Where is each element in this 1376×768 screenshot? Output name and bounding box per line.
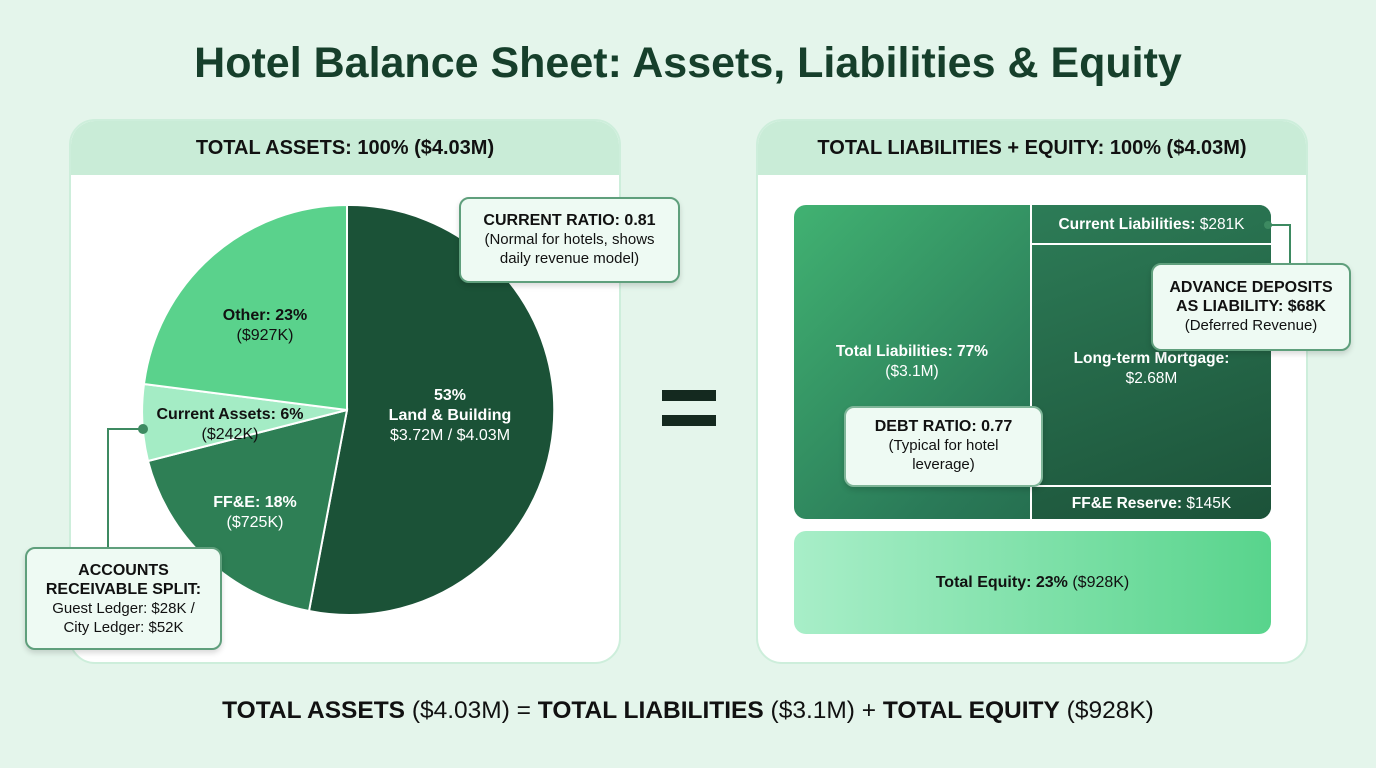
panel: assets	[69, 119, 621, 664]
callout: accounts receivable	[25, 547, 222, 650]
block: right column	[1032, 205, 1271, 519]
current liabilities: Current Liabilities: $281K	[1058, 216, 1245, 233]
slice: other	[144, 205, 347, 410]
callout: debt ratio	[844, 406, 1043, 487]
callout: debt ratio: leverage)	[912, 456, 975, 473]
label: land & building: $3.72M / $4.03M	[390, 427, 510, 444]
callout: debt ratio: (Typical for hotel	[888, 437, 999, 454]
long-term mortgage: Long-term Mortgage:	[1074, 350, 1229, 367]
slice: current assets	[142, 384, 347, 461]
callout: advance deposits: ADVANCE DEPOSITS	[1169, 279, 1333, 296]
label: FF&E	[213, 494, 297, 531]
block: total equity	[794, 531, 1271, 634]
callout: current ratio: (Normal for hotels, shows	[484, 231, 655, 248]
connector: AR	[108, 429, 143, 548]
label: current assets	[156, 406, 304, 443]
assets header	[71, 121, 619, 175]
FF&E reserve: FF&E Reserve: $145K	[1072, 495, 1231, 512]
label: land & building	[389, 387, 511, 444]
callout: accounts receivable: Guest Ledger: $28K /	[52, 600, 195, 617]
liabilities header	[758, 121, 1306, 175]
callout: current ratio: CURRENT RATIO: 0.81	[483, 212, 656, 229]
callout: current ratio	[459, 197, 680, 283]
callout: accounts receivable: ACCOUNTS	[78, 562, 169, 579]
label: other: ($927K)	[237, 327, 293, 344]
block: total liabilities	[836, 343, 988, 380]
block: total liabilities: Total Liabilities: 77%	[836, 343, 988, 360]
label: land & building: Land & Building	[389, 407, 511, 424]
panel: liabilities + equity	[756, 119, 1308, 664]
label: current assets: Current Assets: 6%	[156, 406, 304, 423]
block: total liabilities: ($3.1M)	[885, 363, 939, 380]
slice: FF&E	[148, 410, 347, 611]
label: current assets: ($242K)	[202, 426, 258, 443]
liabilities header: TOTAL LIABILITIES + EQUITY: 100% ($4.03M)	[817, 137, 1247, 159]
block: total equity: Total Equity: 23% ($928K)	[936, 574, 1129, 591]
label: FF&E: FF&E: 18%	[213, 494, 297, 511]
callout: advance deposits: AS LIABILITY: $68K	[1176, 298, 1326, 315]
treemap: liabilities	[794, 205, 1271, 519]
equals sign	[662, 390, 716, 426]
callout: accounts receivable: RECEIVABLE SPLIT:	[46, 581, 201, 598]
callout: accounts receivable: City Ledger: $52K	[63, 619, 184, 636]
label: other	[223, 307, 307, 344]
label: land & building: 53%	[434, 387, 466, 404]
pie chart	[107, 206, 554, 614]
callout: debt ratio: DEBT RATIO: 0.77	[875, 418, 1012, 435]
callout: advance deposits	[1151, 263, 1351, 351]
long-term mortgage	[1074, 350, 1229, 387]
long-term mortgage: $2.68M	[1126, 370, 1177, 387]
equation: TOTAL ASSETS ($4.03M) = TOTAL LIABILITIES ($3.1M) + TOTAL EQUITY ($928K)	[222, 697, 1154, 724]
connector: advance deposits	[1264, 221, 1291, 263]
callout: current ratio: daily revenue model)	[500, 250, 639, 267]
title: Hotel Balance Sheet: Assets, Liabilities & Equity	[194, 39, 1182, 87]
slice: land & building	[309, 205, 554, 615]
label: other: Other: 23%	[223, 307, 307, 324]
assets header: TOTAL ASSETS: 100% ($4.03M)	[196, 137, 494, 159]
label: FF&E: ($725K)	[227, 514, 283, 531]
callout: advance deposits: (Deferred Revenue)	[1185, 317, 1317, 334]
